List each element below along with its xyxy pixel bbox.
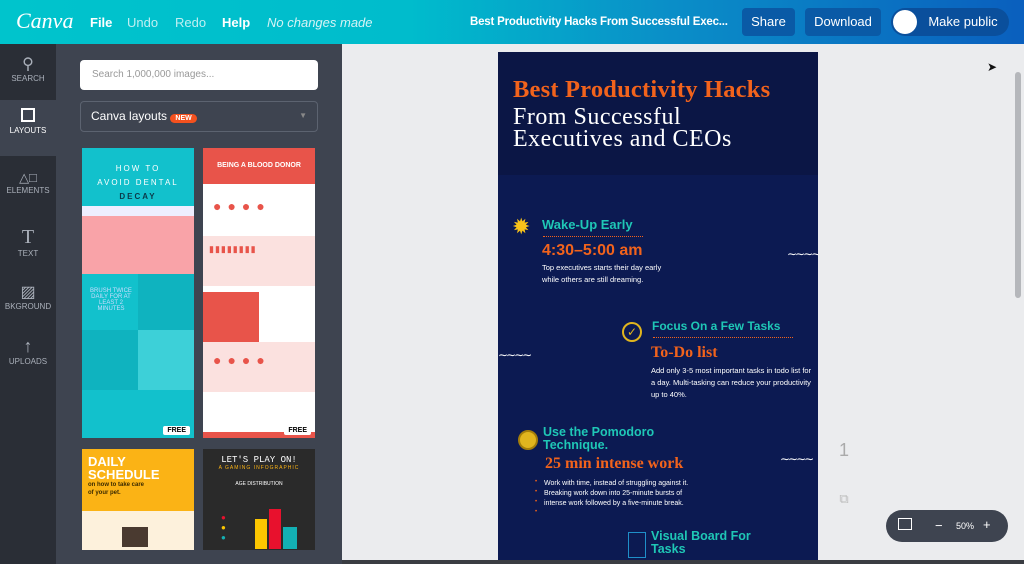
template: dental: AVOID DENTAL (97, 178, 179, 187)
make public toggle: Make public (928, 14, 998, 29)
layouts tab: LAYOUTS (10, 126, 46, 135)
section: focus: To-Do list (651, 344, 718, 361)
section: wake up: 4:30–5:00 am (542, 242, 643, 259)
icon: check circle (622, 322, 642, 342)
template: dental (82, 148, 194, 438)
template: daily schedule: SCHEDULE (88, 467, 160, 482)
share button: Share (751, 14, 786, 29)
template: blood donor: FREE (288, 427, 307, 434)
search tab: ⚲ (22, 56, 34, 73)
search tab: SEARCH (11, 74, 45, 83)
layouts tab (0, 100, 56, 156)
search tab (11, 56, 45, 83)
top bar (0, 0, 1024, 44)
template: dental: HOW TO (116, 164, 160, 173)
page controls (839, 440, 849, 506)
section: pomodoro: Work with time, instead of struggling against it. Breaking work down into 25-minute bursts of intense work followed by a five-minute break. (544, 480, 688, 507)
zoom control (886, 510, 1008, 542)
page controls: ⧉ (839, 491, 849, 506)
background tab: BKGROUND (5, 302, 51, 311)
template: dental: BRUSH TWICE DAILY FOR AT LEAST 2 MINUTES (90, 288, 132, 312)
download button: Download (814, 14, 872, 29)
menu: File (90, 15, 112, 30)
scrollbar (1015, 72, 1021, 298)
background tab (5, 284, 51, 311)
menu: Undo (127, 15, 158, 30)
template: daily schedule: on how to take care (88, 482, 144, 488)
template: daily schedule (82, 449, 194, 550)
page controls: 1 (839, 440, 849, 460)
search box: Search 1,000,000 images... (92, 69, 214, 80)
icon: sun: ✹ (512, 214, 530, 239)
header: Best Productivity Hacks (513, 76, 770, 103)
section: pomodoro: • (535, 509, 537, 515)
section: pomodoro: • (535, 479, 537, 485)
menu: Redo (175, 15, 206, 30)
menu: No changes made (267, 15, 373, 30)
section: wake up: Top executives starts their day early (542, 263, 661, 272)
template: blood donor: ▮▮▮▮▮▮▮▮ (209, 244, 257, 254)
section: focus (622, 319, 811, 399)
section: pomodoro: Technique. (543, 438, 608, 452)
background tab: ▨ (20, 284, 36, 301)
section: pomodoro: • (535, 489, 537, 495)
icon: timer (518, 430, 538, 450)
infographic canvas (498, 52, 818, 560)
template: gaming: ● (221, 533, 226, 542)
make public toggle (891, 8, 1009, 36)
template: gaming: A GAMING INFOGRAPHIC (219, 465, 299, 471)
template: dental: FREE (167, 427, 186, 434)
section: pomodoro: • (535, 499, 537, 505)
layouts dropdown (80, 101, 318, 132)
icon: check circle: ✓ (627, 325, 637, 339)
section: focus: Add only 3-5 most important tasks in todo list for a day. Multi-tasking can reduce your productivity up to 40%. (651, 366, 811, 399)
wave: ∼∼∼∼ (780, 452, 812, 466)
share button (742, 8, 795, 36)
section: focus: Focus On a Few Tasks (652, 319, 780, 333)
wave: ∼∼∼∼ (498, 348, 530, 362)
layouts panel (56, 44, 342, 564)
section: pomodoro (518, 425, 688, 515)
header: From Successful (513, 104, 681, 130)
uploads tab: ↑ (24, 336, 32, 356)
icon sidebar (0, 44, 56, 564)
template: gaming: ● (221, 523, 226, 532)
menu (90, 15, 373, 30)
template: daily schedule: of your pet. (88, 490, 121, 496)
section: visual board: Visual Board For (651, 529, 751, 543)
text tab (18, 226, 38, 258)
cursor: ➤ (987, 60, 997, 74)
template: gaming (203, 449, 315, 550)
zoom control: + (983, 517, 991, 532)
template: gaming: ● (221, 513, 226, 522)
elements tab: △□ (19, 170, 37, 185)
template: daily schedule: DAILY (88, 454, 126, 469)
section: wake up: Wake-Up Early (542, 217, 633, 232)
template: blood donor (203, 148, 315, 438)
zoom control: − (935, 518, 943, 533)
icon: board (628, 532, 646, 558)
template: gaming: AGE DISTRIBUTION (235, 481, 283, 487)
section: wake up: while others are still dreaming. (542, 275, 643, 284)
template: blood donor: ●●●● (213, 198, 271, 214)
menu: Help (222, 15, 250, 30)
section: visual board (628, 529, 751, 558)
download button (805, 8, 881, 36)
template: blood donor: BEING A BLOOD DONOR (217, 162, 301, 169)
header (498, 52, 818, 175)
template: gaming: LET'S PLAY ON! (221, 455, 297, 465)
layouts dropdown: ▼ (299, 111, 307, 120)
uploads tab (9, 336, 47, 366)
template: blood donor: ●●●● (213, 352, 271, 368)
logo: Canva (16, 8, 73, 33)
uploads tab: UPLOADS (9, 357, 47, 366)
section: pomodoro: 25 min intense work (545, 455, 683, 472)
zoom control: 50% (956, 521, 974, 531)
elements tab (6, 170, 50, 195)
bottom strip (342, 560, 1024, 564)
text tab: TEXT (18, 249, 38, 258)
template: dental: DECAY (119, 192, 157, 201)
section: pomodoro: Use the Pomodoro (543, 425, 654, 439)
search box (80, 60, 318, 90)
section: visual board: Tasks (651, 542, 686, 556)
section: wake up (512, 214, 662, 284)
elements tab: ELEMENTS (6, 186, 50, 195)
header: Executives and CEOs (513, 126, 732, 152)
document title: Best Productivity Hacks From Successful Exec... (470, 16, 728, 28)
layouts dropdown: Canva layouts NEW (91, 109, 192, 123)
text tab: T (22, 226, 34, 248)
